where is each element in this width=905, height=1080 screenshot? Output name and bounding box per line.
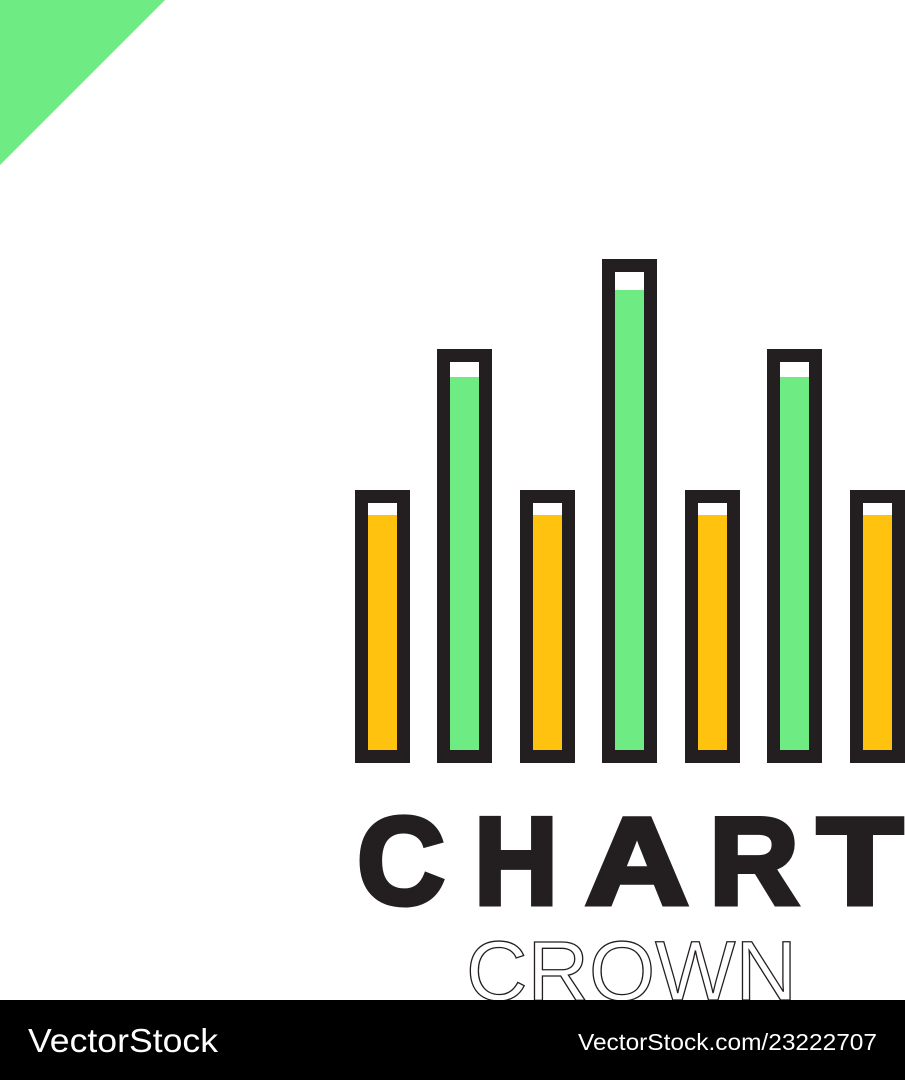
title CHART: A	[585, 793, 689, 931]
bar 7	[850, 490, 905, 763]
corner triangle	[0, 0, 165, 165]
bar 5	[685, 490, 740, 763]
bar 4	[602, 259, 657, 763]
title CHART	[357, 793, 903, 931]
footer bar	[0, 1000, 905, 1080]
footer id: VectorStock.com/23222707	[578, 1029, 877, 1055]
title CHART: T	[817, 793, 903, 931]
subtitle CROWN: CROWN	[466, 924, 797, 1018]
title CHART: R	[709, 793, 799, 931]
bar 6	[767, 349, 822, 763]
bar chart logo	[355, 259, 905, 763]
footer brand: VectorStock	[28, 1022, 219, 1059]
bar 2	[437, 349, 492, 763]
bar 1	[355, 490, 410, 763]
title CHART: C	[357, 793, 445, 931]
title CHART: H	[474, 793, 558, 931]
bar 3	[520, 490, 575, 763]
